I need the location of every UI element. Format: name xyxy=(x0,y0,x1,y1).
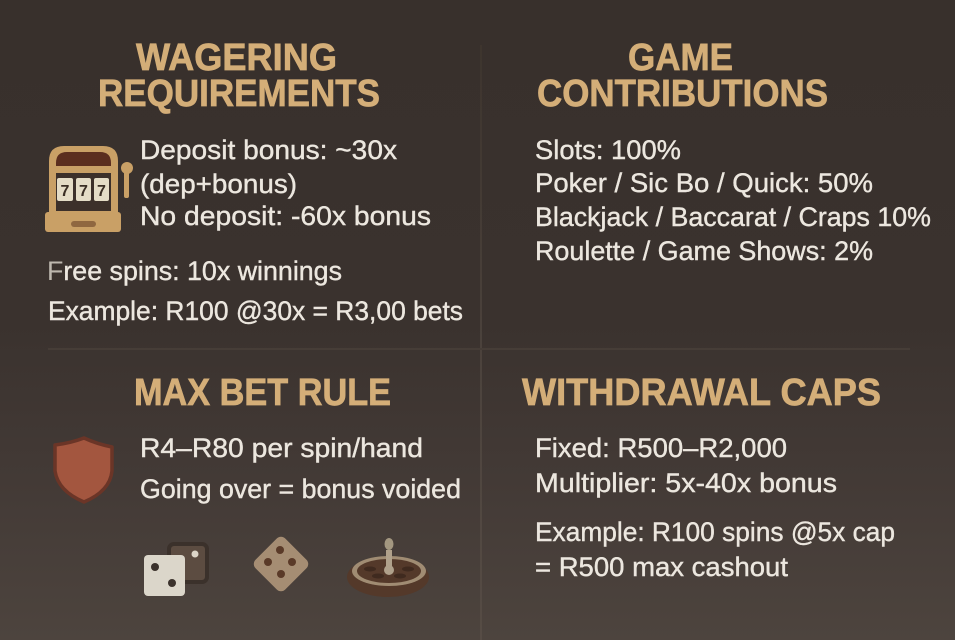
heading: wagering requirements: WAGERING xyxy=(136,37,337,79)
text: max bet terms: R4–R80 per spin/hand xyxy=(140,433,423,463)
icon: slot machine: 7 xyxy=(79,183,88,200)
text: max bet terms: Going over = bonus voided xyxy=(140,474,461,504)
text: contribution rates: Poker / Sic Bo / Quick: 50% xyxy=(535,168,873,198)
icon: slot machine: 7 xyxy=(97,183,106,200)
panel: max bet rule xyxy=(55,372,461,597)
heading: game contributions: GAME xyxy=(628,37,733,79)
text: contribution rates: Slots: 100% xyxy=(535,135,681,165)
text: wagering terms: (dep+bonus) xyxy=(140,169,297,199)
icon: roulette wheel xyxy=(347,538,429,597)
text: contribution rates: Blackjack / Baccarat / Craps 10% xyxy=(535,202,931,232)
icon: slot machine: 7 xyxy=(61,183,70,200)
heading: game contributions: CONTRIBUTIONS xyxy=(537,73,828,115)
text: withdrawal terms: = R500 max cashout xyxy=(535,552,788,582)
panel: wagering requirements xyxy=(45,37,463,326)
icon: shield xyxy=(55,438,112,502)
icon: pair of dice xyxy=(144,544,207,596)
heading: wagering requirements xyxy=(98,37,380,115)
text: withdrawal terms: Multiplier: 5x-40x bonus xyxy=(535,468,837,498)
text: contribution rates xyxy=(535,135,931,266)
text: withdrawal terms: Fixed: R500–R2,000 xyxy=(535,433,787,463)
text: max bet terms xyxy=(140,433,461,504)
panel: game contributions xyxy=(535,37,931,266)
text: wagering terms: Deposit bonus: ~30x xyxy=(140,135,398,165)
icon: tilted die xyxy=(251,534,311,594)
text: withdrawal terms: Example: R100 spins @5x cap xyxy=(535,517,895,547)
heading: wagering requirements: REQUIREMENTS xyxy=(98,73,380,115)
heading: max bet rule: MAX BET RULE xyxy=(134,372,391,414)
heading: game contributions xyxy=(537,37,828,115)
icon: slot machine xyxy=(45,146,133,232)
text: contribution rates: Roulette / Game Shows: 2% xyxy=(535,236,873,266)
text: withdrawal terms xyxy=(535,433,895,582)
heading: withdrawal caps: WITHDRAWAL CAPS xyxy=(522,372,881,414)
panel: withdrawal caps xyxy=(522,372,895,582)
text: wagering terms xyxy=(47,135,463,326)
text: wagering terms: No deposit: -60x bonus xyxy=(140,201,431,231)
text: wagering terms: Example: R100 @30x = R3,00 bets xyxy=(48,296,463,326)
text: wagering terms: Free spins: 10x winnings xyxy=(47,256,342,286)
